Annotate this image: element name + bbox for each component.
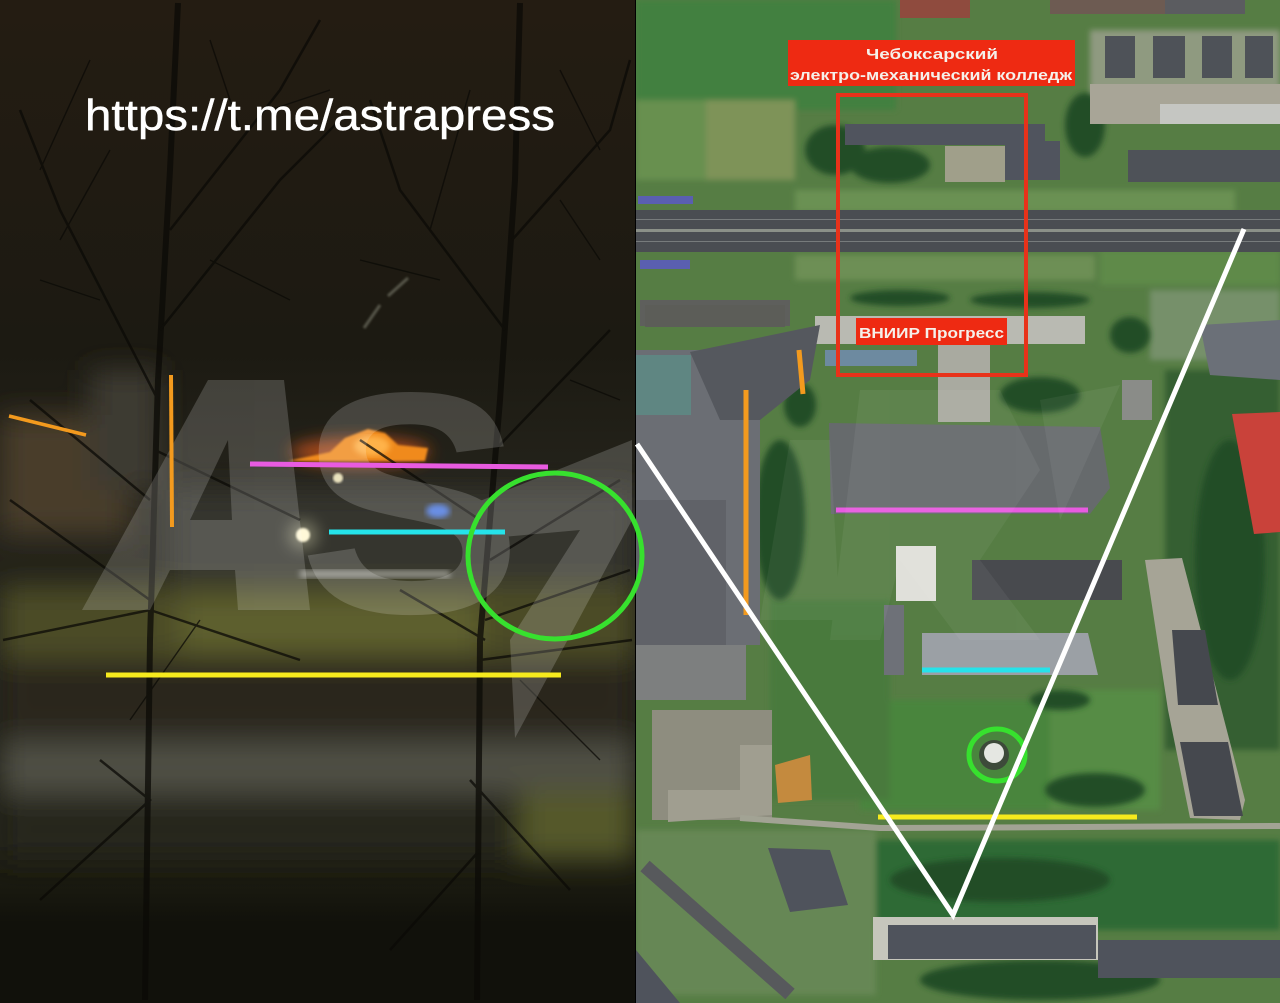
building: cyan-marked hall [922,633,1098,675]
fire [288,429,430,466]
label: VNIIR Progress [856,318,1007,345]
source link: https://t.me/astrapress [85,91,555,140]
road south [740,818,1280,828]
building: south blocks [636,848,1280,1003]
panel: night video frame [0,0,635,1003]
building: east long block [1145,558,1245,820]
building: VNIIR Progress [815,316,1085,422]
marker: yellow line [878,814,1137,820]
watermark: ASTRA [82,380,632,738]
marker: orange left [9,416,86,435]
marker: cyan line [922,668,1050,672]
bare tree branches [3,3,632,1000]
building: magenta-marked hall [829,423,1110,514]
building: white hangar [896,546,936,601]
streak in sky [364,278,408,328]
tree clusters [755,93,1265,1000]
highway [636,196,1280,269]
marker: magenta line [836,508,1088,512]
marker: yellow line [106,672,561,678]
sightlines: white V across panels [637,229,1244,915]
parking [645,326,785,327]
divider [635,0,636,1003]
marker: green circle on frame [468,473,642,639]
building: dark hall [972,560,1122,600]
label: college [788,40,1075,86]
buildings: north-east blocks [900,0,1280,182]
building: red roof [1232,412,1280,534]
marker: orange long [744,390,748,615]
dirt patch [775,755,812,803]
highlight: red rectangle [838,95,1026,375]
road south-west [645,866,790,994]
marker: green circle [969,729,1025,781]
building: college [845,124,1060,180]
building: north-east complex [1200,320,1280,380]
dome [979,740,1009,770]
marker: orange short [799,350,803,394]
watermark: map [760,385,1120,640]
building: mall [636,300,820,822]
panel: satellite map [636,0,1280,1003]
marker: orange vertical [171,375,172,527]
label: college: Чебоксарский [866,46,998,63]
lights [289,473,450,578]
label: VNIIR Progress: ВНИИР Прогресс [859,325,1004,342]
label: college: электро-механический колледж [790,67,1072,84]
marker: cyan line [329,530,505,534]
watermark: ASTRA: S [298,327,523,679]
marker: magenta line [250,464,548,467]
